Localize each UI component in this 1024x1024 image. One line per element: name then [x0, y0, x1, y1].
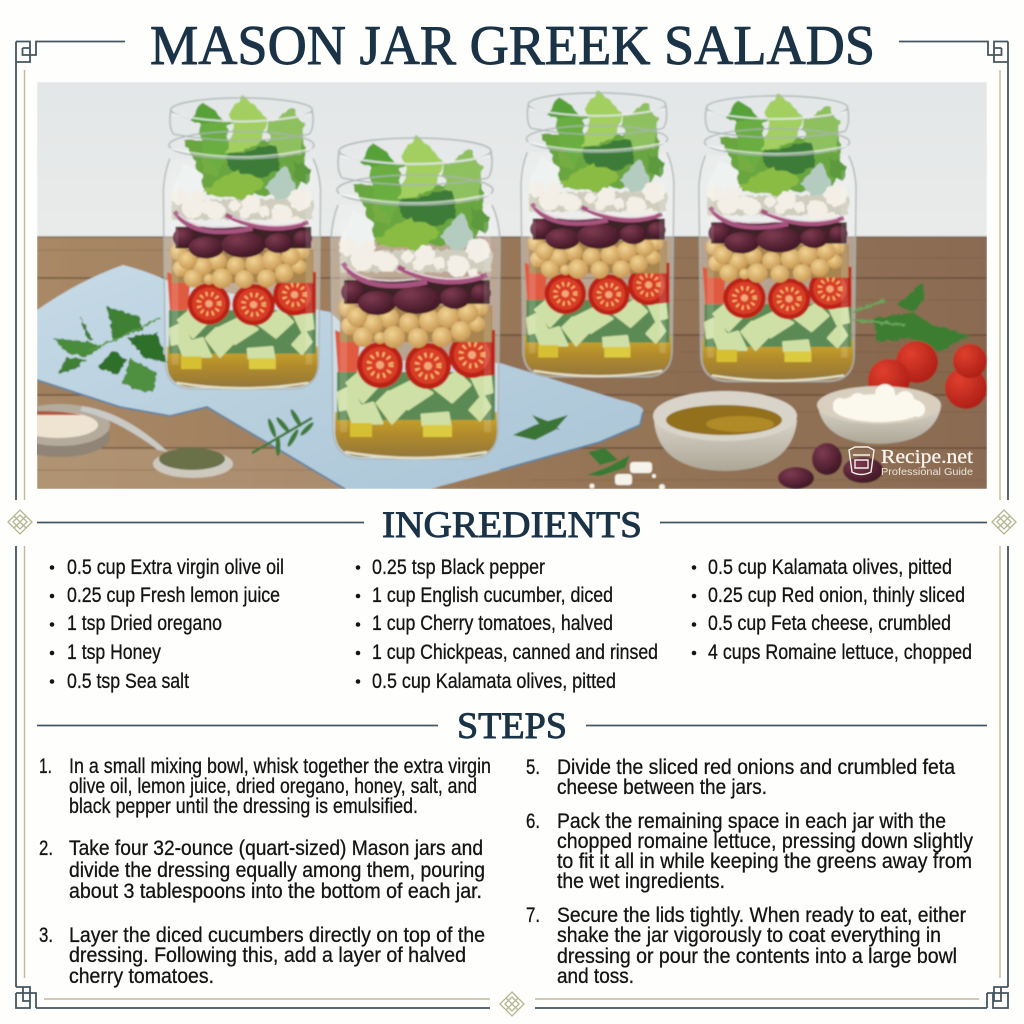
- ingredients column 3: 0.5 cup Feta cheese, crumbled: [708, 612, 951, 635]
- herb: parsley right: [853, 282, 970, 352]
- jar 3: [521, 90, 674, 377]
- step 5: 5.: [526, 756, 540, 779]
- tomatoes: [868, 341, 987, 409]
- step 1: black pepper until the dressing is emulsified.: [69, 795, 418, 818]
- ingredients column 2: 0.5 cup Kalamata olives, pitted: [372, 670, 616, 693]
- ingredients column 1: 0.25 cup Fresh lemon juice: [67, 584, 280, 607]
- step 6: Pack the remaining space in each jar with the: [557, 810, 946, 833]
- step 2: about 3 tablespoons into the bottom of each jar.: [69, 880, 482, 903]
- step 3: cherry tomatoes.: [69, 965, 214, 988]
- step 6: to fit it all in while keeping the greens away from: [557, 850, 972, 873]
- towel edge: [37, 380, 643, 489]
- step 2: divide the dressing equally among them, pouring: [69, 859, 485, 882]
- icon: chef hat: [849, 447, 874, 474]
- steps right column: [526, 756, 973, 988]
- step 3: [39, 924, 485, 988]
- step 2: Take four 32-ounce (quart-sized) Mason jars and: [69, 837, 483, 860]
- ingredients column 2: 1 cup English cucumber, diced: [372, 584, 613, 607]
- herb: parsley left: [53, 307, 167, 393]
- title: MASON JAR GREEK SALADS: [150, 15, 875, 77]
- ornament: left diamond: [8, 510, 32, 534]
- ingredients column 2: 1 cup Cherry tomatoes, halved: [372, 612, 613, 635]
- step 1: 1.: [39, 755, 52, 778]
- step 6: chopped romaine lettuce, pressing down slightly: [557, 830, 973, 853]
- step 3: dressing. Following this, add a layer of halved: [69, 944, 466, 967]
- step 1: In a small mixing bowl, whisk together the extra virgin: [69, 755, 491, 778]
- step 1: olive oil, lemon juice, dried oregano, honey, salt, and: [69, 775, 477, 798]
- step 7: [526, 904, 966, 988]
- step 6: [526, 810, 973, 893]
- ornament: bottom diamond: [500, 992, 524, 1016]
- step 3: Layer the diced cucumbers directly on top of the: [69, 924, 485, 947]
- step 2: 2.: [39, 837, 53, 860]
- ingredients column 3: 0.25 cup Red onion, thinly sliced: [708, 584, 965, 607]
- step 5: Divide the sliced red onions and crumbled feta: [557, 756, 955, 779]
- step 7: dressing or pour the contents into a large bowl: [557, 945, 957, 968]
- panel: hero photo: [10, 82, 987, 490]
- step 7: shake the jar vigorously to coat everything in: [557, 924, 941, 947]
- step 1: [39, 755, 491, 818]
- step 2: [39, 837, 485, 903]
- step 7: Secure the lids tightly. When ready to eat, either: [557, 904, 966, 927]
- steps left column: [39, 755, 491, 988]
- ingredients column 1: 1 tsp Honey: [67, 641, 161, 664]
- jar 1: [163, 95, 321, 389]
- step 7: 7.: [526, 904, 540, 927]
- bowl of feta: [817, 384, 941, 444]
- heading: ingredients: INGREDIENTS: [382, 505, 642, 546]
- jar lid: [37, 403, 111, 458]
- ingredients column 2: 1 cup Chickpeas, canned and rinsed: [372, 641, 658, 664]
- bowl of dressing: [653, 391, 797, 471]
- ingredients column 1: 0.5 tsp Sea salt: [67, 670, 189, 693]
- blue linen towel: [37, 265, 643, 489]
- step 7: and toss.: [557, 965, 634, 988]
- step 5: [526, 756, 955, 799]
- ornament: right diamond: [992, 510, 1016, 534]
- feta crumbs: [590, 462, 665, 490]
- ingredients column 2: 0.25 tsp Black pepper: [372, 556, 545, 579]
- herb sprig on towel: [513, 415, 568, 440]
- heading: steps: STEPS: [457, 706, 567, 747]
- ingredients column 2: [356, 556, 658, 693]
- ingredients column 1: [50, 556, 284, 693]
- jar 2: [331, 135, 500, 459]
- logo: Recipe.net: Professional Guide: [881, 466, 973, 478]
- ingredients column 3: [692, 556, 972, 664]
- kalamata olives: [778, 443, 883, 489]
- herb: rosemary: [252, 408, 315, 456]
- logo: Recipe.net: [849, 446, 973, 478]
- ingredients column 3: 4 cups Romaine lettuce, chopped: [708, 641, 972, 664]
- ingredients column 1: 1 tsp Dried oregano: [67, 612, 222, 635]
- jar 4: [699, 93, 856, 382]
- herb sprig on table: [587, 448, 630, 476]
- step 5: cheese between the jars.: [557, 776, 767, 799]
- step 3: 3.: [39, 924, 53, 947]
- step 6: 6.: [526, 810, 540, 833]
- spoon of oregano: [80, 406, 233, 478]
- step 6: the wet ingredients.: [557, 870, 725, 893]
- ingredients column 1: 0.5 cup Extra virgin olive oil: [67, 556, 284, 579]
- ingredients column 3: 0.5 cup Kalamata olives, pitted: [708, 556, 952, 579]
- logo: Recipe.net: Recipe.net: [881, 446, 973, 468]
